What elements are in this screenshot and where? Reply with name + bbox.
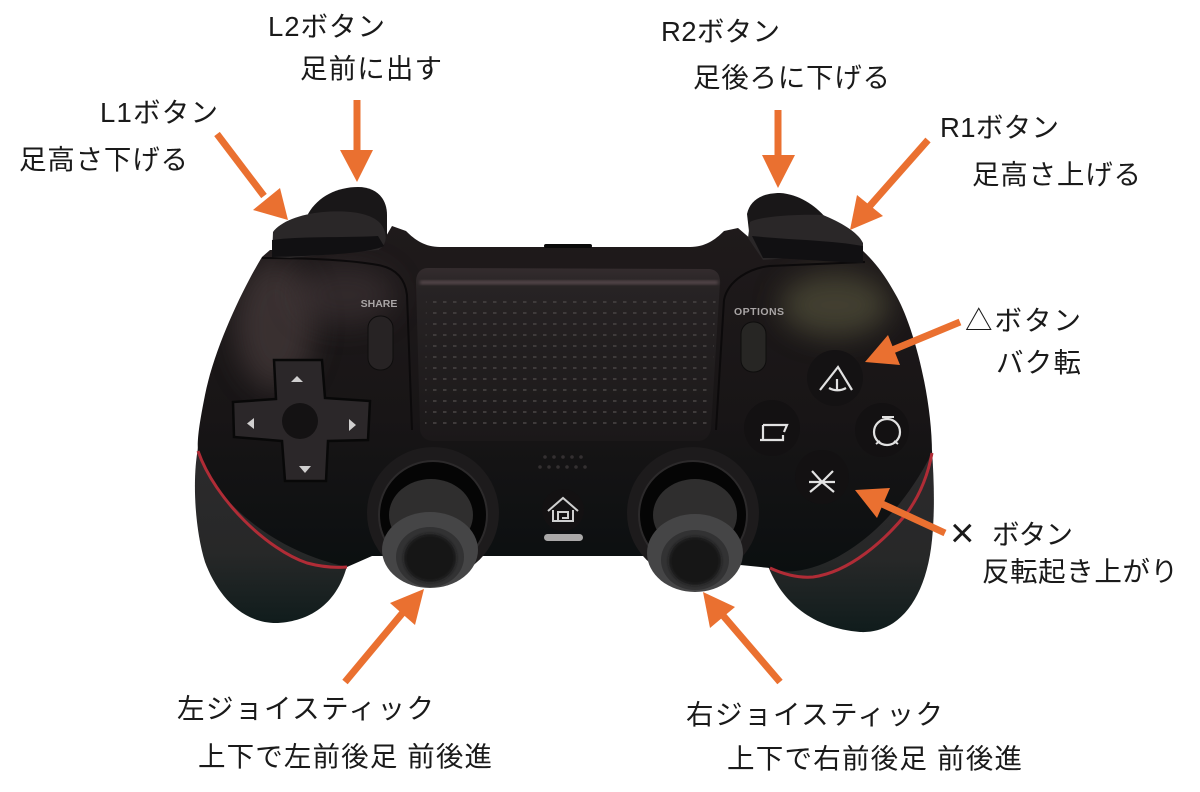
- label: right stick: 上下で右前後足 前後進: [727, 743, 1022, 774]
- touchpad dot texture: [425, 292, 716, 432]
- label: triangle: △ボタン: [965, 305, 1081, 336]
- home button: [542, 489, 584, 531]
- speaker grille: [538, 455, 587, 469]
- label: left stick: [177, 693, 492, 772]
- right trigger R2: [747, 193, 826, 240]
- touchpad: [416, 268, 720, 441]
- L1 front edge: [272, 236, 384, 257]
- label: L1: 足高さ下げる: [19, 144, 188, 175]
- touchpad highlight: [420, 281, 718, 284]
- arrow: L2: [340, 100, 373, 182]
- label: cross: [950, 509, 1178, 587]
- options button: [741, 322, 766, 372]
- options label: OPTIONS: [734, 306, 784, 318]
- label: L1: L1ボタン: [100, 97, 218, 128]
- label: R2: 足後ろに下げる: [693, 62, 890, 93]
- left trigger L2: [308, 187, 387, 240]
- left joystick: [367, 447, 499, 588]
- R1 button: [748, 215, 863, 263]
- label: R1: 足高さ上げる: [972, 159, 1141, 190]
- arrow: L1: [217, 134, 288, 220]
- controller: [195, 187, 934, 632]
- cross button: [795, 450, 849, 504]
- label: left stick: 上下で左前後足 前後進: [198, 741, 492, 772]
- R1 front edge: [752, 236, 863, 263]
- label: R1: [940, 112, 1141, 190]
- left grip: [195, 448, 347, 623]
- label: left stick: 左ジョイスティック: [177, 693, 434, 724]
- label: R1: R1ボタン: [940, 112, 1059, 143]
- label: cross: ボタン: [992, 519, 1073, 550]
- shoulder seams: [262, 258, 865, 430]
- turbo bar: [544, 534, 583, 541]
- right grip: [768, 450, 934, 632]
- arrow: triangle: [865, 322, 960, 365]
- label: R2: [661, 16, 890, 93]
- usb slot: [544, 244, 592, 248]
- triangle button: [807, 350, 863, 406]
- right joystick: [627, 447, 759, 592]
- red trim left: [198, 451, 347, 567]
- share label: SHARE: [361, 298, 397, 310]
- L1 button: [272, 211, 386, 258]
- label: right stick: [686, 699, 1022, 774]
- label: cross: ×: [950, 509, 975, 556]
- label: triangle: バク転: [996, 347, 1081, 378]
- controller body: [198, 226, 932, 571]
- label: R2: R2ボタン: [661, 16, 780, 47]
- arrow: right stick: [703, 592, 780, 682]
- arrow: cross: [855, 488, 945, 533]
- arrow: R1: [850, 140, 928, 230]
- label: L2: 足前に出す: [300, 53, 442, 84]
- label: L1: [19, 97, 218, 175]
- share button: [368, 316, 393, 370]
- label: right stick: 右ジョイスティック: [686, 699, 943, 730]
- label: L2: [268, 11, 442, 84]
- circle button: [855, 403, 909, 457]
- label: cross: 反転起き上がり: [982, 556, 1178, 587]
- square button: [744, 400, 800, 456]
- d-pad: [233, 360, 370, 481]
- label: triangle: [965, 305, 1081, 378]
- arrow: R2: [762, 110, 795, 188]
- arrow: left stick: [345, 589, 424, 682]
- label: L2: L2ボタン: [268, 11, 385, 42]
- red trim right: [770, 453, 932, 577]
- body highlights: [235, 260, 890, 390]
